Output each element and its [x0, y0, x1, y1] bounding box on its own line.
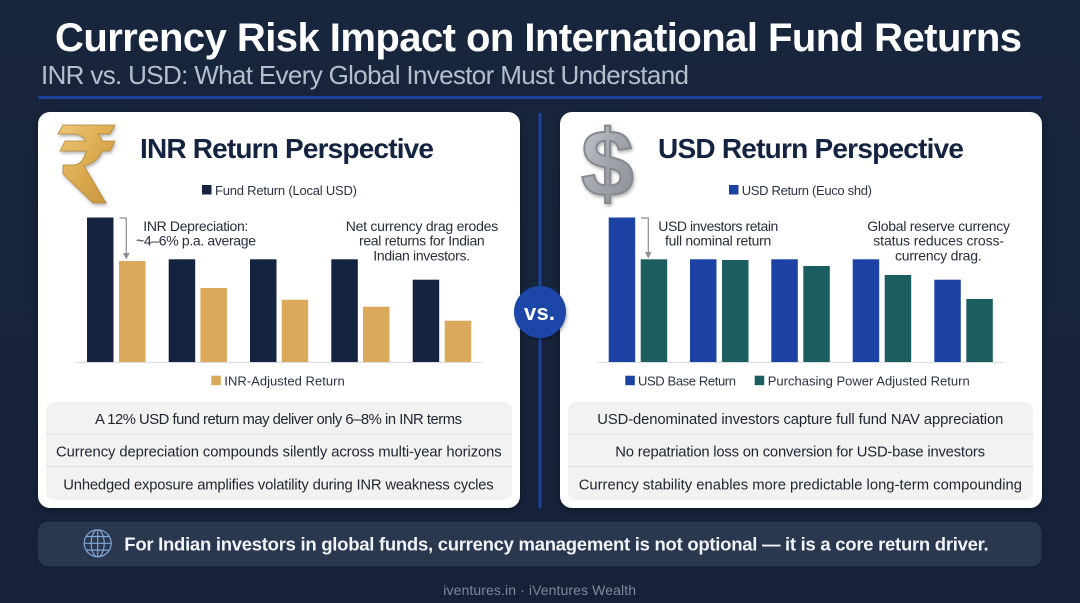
annotation: global reserve currency: Global reserve currency [867, 218, 1010, 234]
list: USD takeaways: Currency stability enables more predictable long-term compounding [579, 477, 1022, 493]
annotation: global reserve currency: currency drag. [895, 247, 982, 263]
annotation: USD investors retain [658, 218, 778, 249]
list: USD takeaways [568, 402, 1033, 500]
footer credit: iventures.in · iVentures Wealth [443, 582, 636, 598]
list: USD takeaways: No repatriation loss on conversion for USD-base investors [615, 445, 985, 461]
legend: USD return: USD Return (Euco shd) [742, 183, 872, 198]
list: USD takeaways: USD-denominated investors capture full fund NAV appreciation [597, 412, 1003, 428]
annotation: net currency drag [346, 218, 498, 263]
annotation: USD investors retain: full nominal return [665, 233, 771, 249]
heading: INR return perspective: INR Return Perspective [140, 133, 434, 164]
legend: USD base and purchasing power: USD Base Return [638, 373, 736, 388]
title: Currency Risk Impact on International Fund Returns [55, 16, 1022, 60]
panel: USD return perspective [560, 111, 1042, 508]
legend: INR-adjusted return: INR-Adjusted Return [224, 373, 345, 388]
icon: silver dollar symbol: $ [581, 111, 634, 217]
annotation: global reserve currency [867, 218, 1010, 263]
annotation: USD investors retain: USD investors retain [658, 218, 778, 234]
annotation: net currency drag: Net currency drag erodes [346, 218, 498, 234]
list: INR takeaways: Unhedged exposure amplifies volatility during INR weakness cycles [63, 477, 494, 493]
annotation: net currency drag: real returns for Indian [359, 233, 485, 249]
divider with vs badge [514, 113, 566, 508]
list: INR takeaways: Currency depreciation compounds silently across multi-year horizons [56, 445, 502, 461]
annotation: INR depreciation [136, 218, 256, 249]
subtitle: INR vs. USD: What Every Global Investor Must Understand [41, 60, 689, 90]
legend: USD base and purchasing power [625, 373, 970, 388]
icon: globe [84, 530, 111, 557]
divider with vs badge: vs. [524, 300, 555, 325]
annotation: net currency drag: Indian investors. [373, 247, 470, 263]
callout: key takeaway bar [38, 522, 1042, 566]
arrow: depreciation drop [120, 218, 130, 260]
list: INR takeaways [46, 402, 512, 500]
annotation: INR depreciation: INR Depreciation: [143, 218, 248, 234]
list: INR takeaways: A 12% USD fund return may deliver only 6–8% in INR terms [95, 412, 462, 428]
legend: fund return: Fund Return (Local USD) [215, 183, 357, 198]
heading: USD return perspective: USD Return Perspective [658, 133, 964, 164]
panel: INR return perspective [38, 112, 520, 508]
bar chart: INR returns [76, 218, 482, 363]
callout text: For Indian investors in global funds, currency management is not optional — it is a core return driver. [124, 534, 989, 555]
legend: USD base and purchasing power: Purchasing Power Adjusted Return [768, 373, 970, 388]
arrow: nominal return [641, 218, 652, 258]
annotation: global reserve currency: status reduces cross- [873, 233, 1004, 249]
icon: gold rupee symbol [58, 125, 115, 203]
annotation: INR depreciation: ~4–6% p.a. average [136, 233, 256, 249]
bar chart: USD returns [598, 218, 1004, 363]
